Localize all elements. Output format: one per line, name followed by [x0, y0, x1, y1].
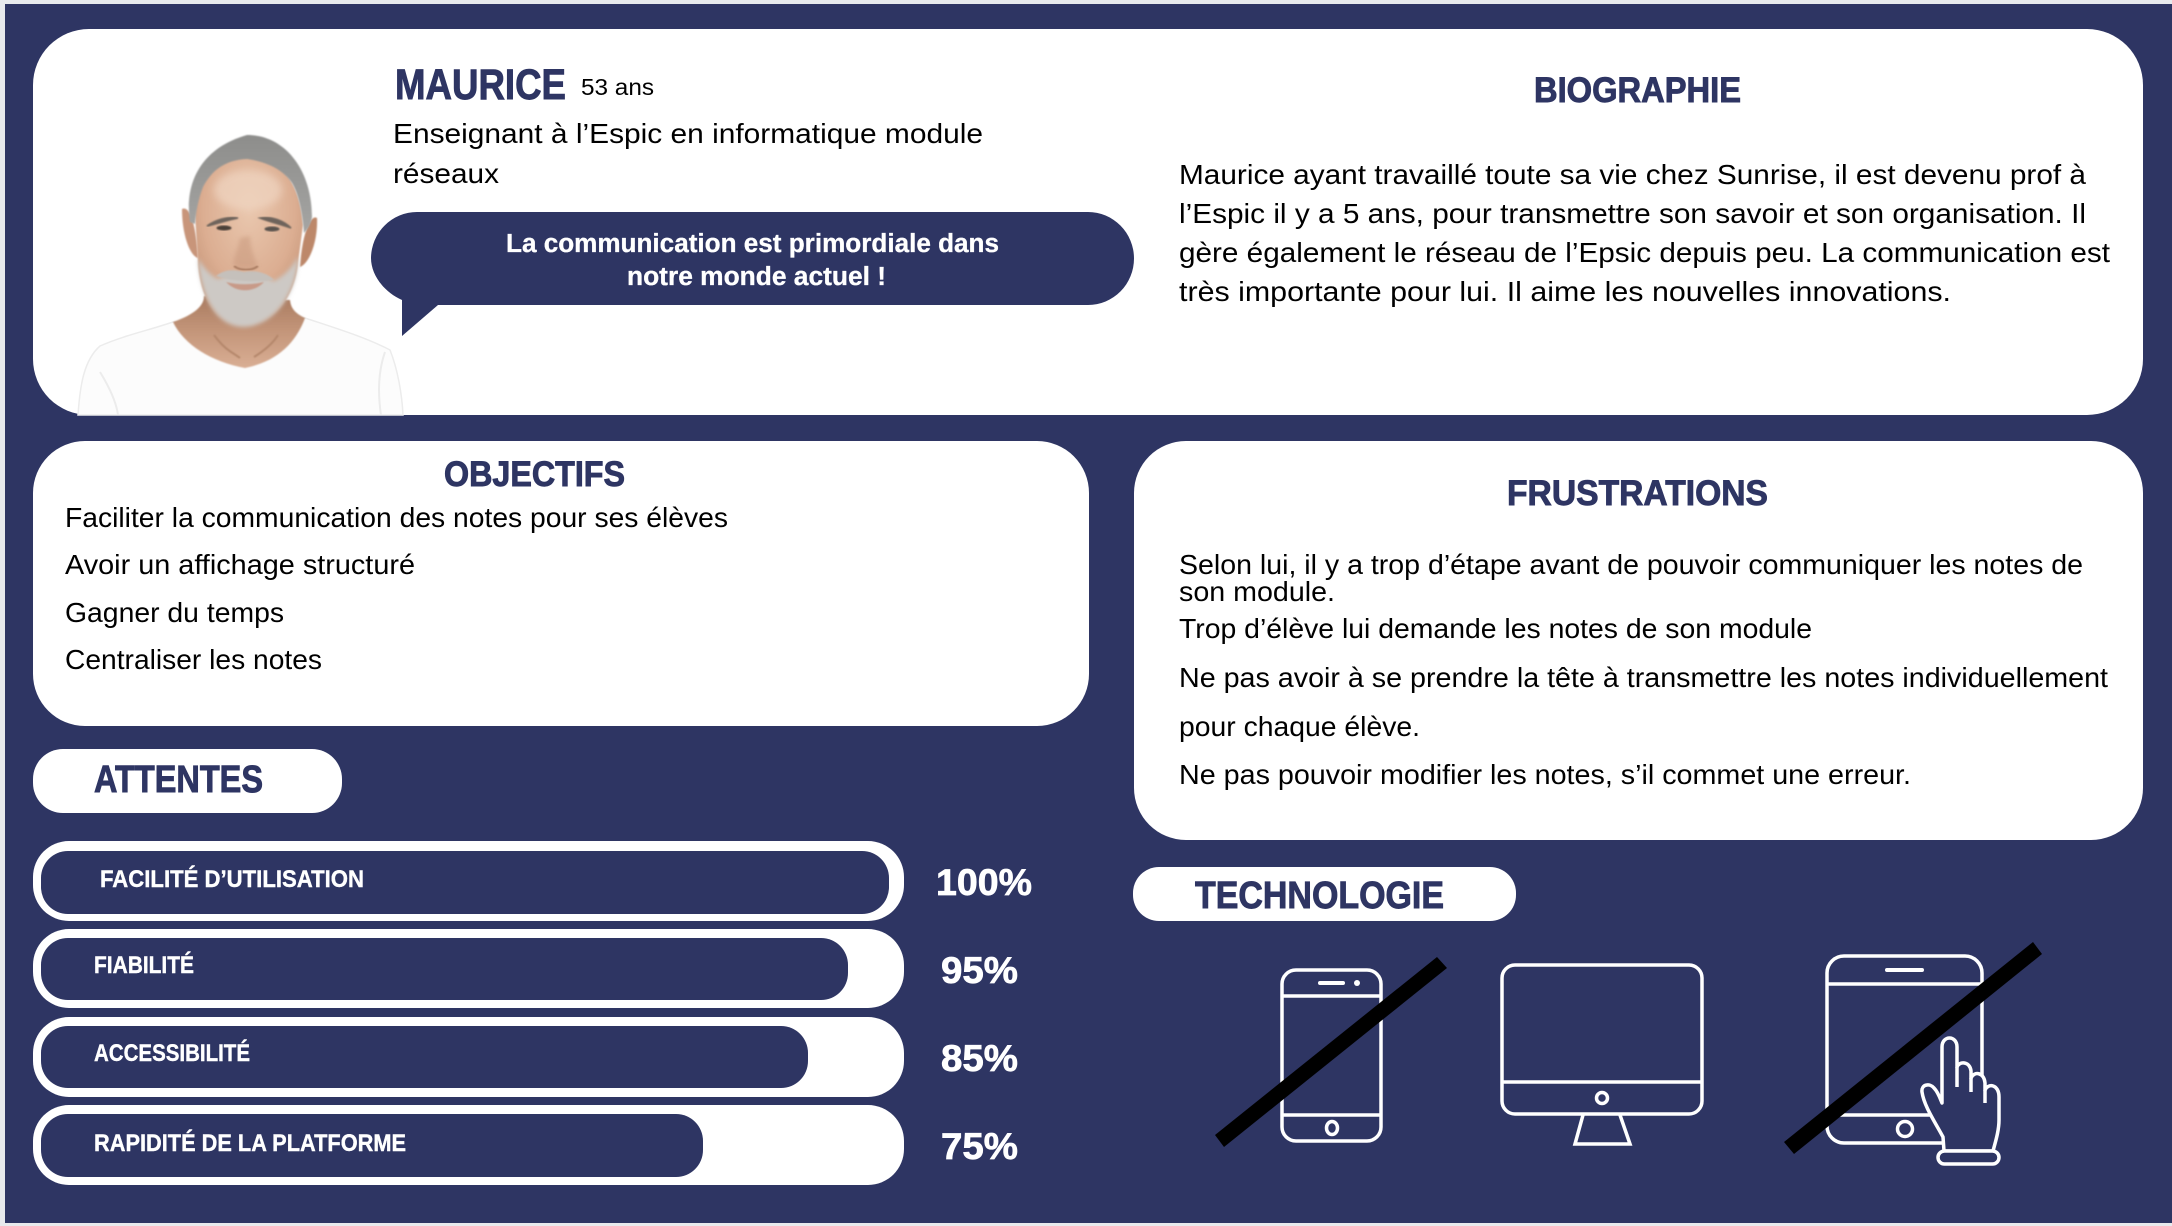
biography text: très importante pour lui. Il aime les nouvelles innovations. [1179, 276, 1951, 307]
ears [182, 208, 198, 258]
heading pill: attentes [33, 749, 342, 813]
panel: profile and biography [33, 29, 2143, 415]
job title: Enseignant à l’Espic en informatique module [393, 118, 983, 149]
heading pill: attentes: ATTENTES [94, 759, 263, 801]
speech bubble with quote [371, 212, 1134, 336]
eyes [216, 226, 232, 230]
heading: biographie: BIOGRAPHIE [1534, 71, 1741, 110]
objectives list [65, 502, 728, 675]
frustrations list: son module. [1179, 576, 1335, 607]
panel: objectifs [33, 441, 1089, 726]
bar: rapidité de la platforme 75% [33, 1105, 1018, 1185]
biography text: Maurice ayant travaillé toute sa vie chez Sunrise, il est devenu prof à [1179, 159, 2086, 190]
icon: desktop monitor [1502, 965, 1702, 1144]
slash over smartphone [1215, 957, 1447, 1147]
objectives list: Avoir un affichage structuré [65, 549, 415, 580]
nose [234, 236, 258, 269]
bar: accessibilité 85%: 85% [941, 1038, 1018, 1079]
heading pill: technologie: TECHNOLOGIE [1195, 875, 1444, 917]
speech bubble with quote: La communication est primordiale dans [506, 230, 999, 258]
bar chart: attentes [33, 841, 1032, 1185]
job title [393, 118, 983, 189]
heading: frustrations: FRUSTRATIONS [1507, 474, 1768, 513]
mouth [226, 282, 264, 290]
frustrations list [1179, 549, 2108, 790]
frustrations list: Ne pas pouvoir modifier les notes, s’il commet une erreur. [1179, 759, 1911, 790]
slash over tablet [1784, 942, 2042, 1154]
frustrations list: pour chaque élève. [1179, 711, 1420, 742]
name: MAURICE [395, 61, 566, 109]
bar: rapidité de la platforme 75%: 75% [941, 1126, 1018, 1167]
icon: crossed-out tablet with hand [1784, 942, 2042, 1164]
bar: facilité d'utilisation 100% [33, 841, 1032, 921]
forehead highlight [214, 170, 282, 210]
bar: fiabilité 95%: 95% [941, 950, 1018, 991]
bar: facilité d'utilisation 100%: FACILITÉ D’UTILISATION [100, 865, 364, 893]
bar: accessibilité 85%: ACCESSIBILITÉ [94, 1039, 250, 1067]
face [195, 155, 303, 327]
biography text [1179, 159, 2110, 307]
white t-shirt [78, 318, 403, 415]
portrait photo of Maurice [78, 135, 403, 415]
heading: objectifs: OBJECTIFS [444, 455, 625, 494]
hair [189, 135, 312, 233]
bar: fiabilité 95% [33, 929, 1018, 1008]
heading pill: technologie [1133, 867, 1516, 921]
biography text: gère également le réseau de l’Epsic depuis peu. La communication est [1179, 237, 2110, 268]
hand pointing [1922, 1038, 1999, 1164]
bar: fiabilité 95%: FIABILITÉ [94, 951, 194, 979]
frustrations list: Selon lui, il y a trop d’étape avant de pouvoir communiquer les notes de [1179, 549, 2083, 580]
speech bubble with quote: notre monde actuel ! [627, 263, 886, 291]
neck [173, 296, 305, 368]
objectives list: Gagner du temps [65, 597, 284, 628]
objectives list: Centraliser les notes [65, 644, 322, 675]
icon: crossed-out smartphone [1215, 957, 1447, 1147]
bar: accessibilité 85% [33, 1017, 1018, 1097]
age: 53 ans [581, 74, 654, 100]
panel: frustrations [1134, 441, 2143, 840]
frustrations list: Ne pas avoir à se prendre la tête à transmettre les notes individuellement [1179, 662, 2108, 693]
bar: facilité d'utilisation 100%: 100% [936, 862, 1032, 903]
bar: rapidité de la platforme 75%: RAPIDITÉ DE LA PLATFORME [94, 1129, 406, 1157]
frustrations list: Trop d’élève lui demande les notes de son module [1179, 613, 1812, 644]
beard [198, 256, 298, 327]
eyebrows [207, 217, 238, 226]
biography text: l’Espic il y a 5 ans, pour transmettre son savoir et son organisation. Il [1179, 198, 2086, 229]
job title: réseaux [393, 158, 499, 189]
objectives list: Faciliter la communication des notes pour ses élèves [65, 502, 728, 533]
